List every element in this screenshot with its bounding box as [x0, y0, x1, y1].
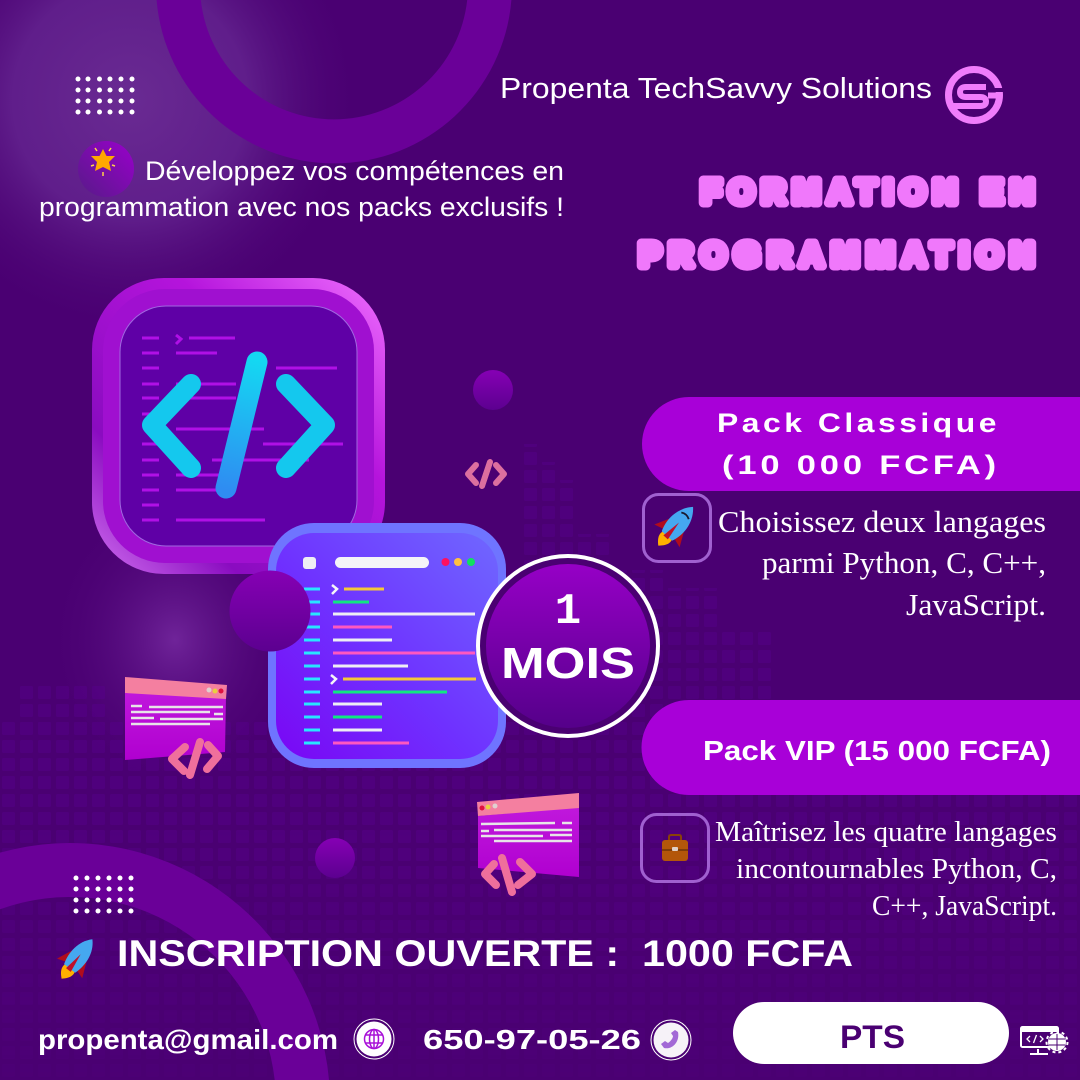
pack vip description — [715, 816, 1057, 922]
icon: brand logo — [948, 70, 1006, 120]
icon: phone — [651, 1020, 691, 1060]
overlapping purple circle — [230, 570, 310, 652]
code window left — [125, 677, 227, 775]
icon: rocket box — [644, 494, 710, 562]
subtitle: Développez vos compétences en — [145, 156, 564, 186]
dot grid bottom — [74, 876, 134, 914]
decorative ring bottom left — [0, 843, 329, 1080]
badge: 1 mois: MOIS — [501, 639, 635, 688]
background grid skyline — [2, 444, 1077, 908]
big code icon — [92, 278, 385, 574]
pack classique header: (10 000 FCFA) — [722, 450, 1000, 480]
pack classique description: parmi Python, C, C++, — [762, 545, 1046, 580]
pack classique description: JavaScript. — [906, 587, 1046, 622]
pack vip header — [642, 700, 1080, 795]
code rows — [331, 585, 476, 743]
icon: star badge — [78, 141, 134, 197]
small floating circle right — [473, 370, 513, 410]
code lines — [142, 335, 343, 520]
badge: 1 mois — [478, 556, 658, 736]
pack classique header — [642, 397, 1080, 491]
title — [639, 173, 1034, 273]
decorative ring top — [157, 0, 511, 163]
subtitle — [39, 156, 564, 222]
contact phone: 650-97-05-26 — [423, 1024, 641, 1055]
code window right — [477, 793, 579, 892]
line numbers — [304, 589, 320, 743]
pack vip description: C++, JavaScript. — [872, 890, 1057, 922]
pack vip header: Pack VIP (15 000 FCFA) — [703, 735, 1051, 766]
icon: rocket inscription — [49, 929, 105, 989]
code editor panel — [268, 523, 506, 768]
inscription banner: INSCRIPTION OUVERTE : 1000 FCFA — [117, 933, 853, 974]
title: FORMATION EN — [701, 173, 1034, 210]
badge: 1 mois: 1 — [555, 587, 581, 637]
pack classique description: Choisissez deux langages — [718, 504, 1046, 539]
dot grid top — [76, 76, 134, 114]
brand name: Propenta TechSavvy Solutions — [500, 73, 932, 105]
pack classique description — [718, 504, 1046, 622]
icon: briefcase box — [642, 814, 708, 882]
subtitle: programmation avec nos packs exclusifs ! — [39, 192, 564, 222]
pts pill: PTS — [840, 1019, 905, 1055]
contact email: propenta@gmail.com — [38, 1024, 338, 1055]
icon: monitor with gear — [1020, 1026, 1068, 1054]
icon: small code tag — [468, 462, 504, 486]
pack vip description: Maîtrisez les quatre langages — [715, 816, 1057, 848]
small floating circle bottom — [315, 838, 355, 878]
title: PROGRAMMATION — [639, 236, 1034, 273]
code symbol — [152, 362, 325, 488]
pack classique header: Pack Classique — [717, 408, 1000, 438]
icon: globe — [354, 1019, 394, 1059]
pts pill — [733, 1002, 1009, 1064]
pack vip description: incontournables Python, C, — [736, 853, 1057, 885]
